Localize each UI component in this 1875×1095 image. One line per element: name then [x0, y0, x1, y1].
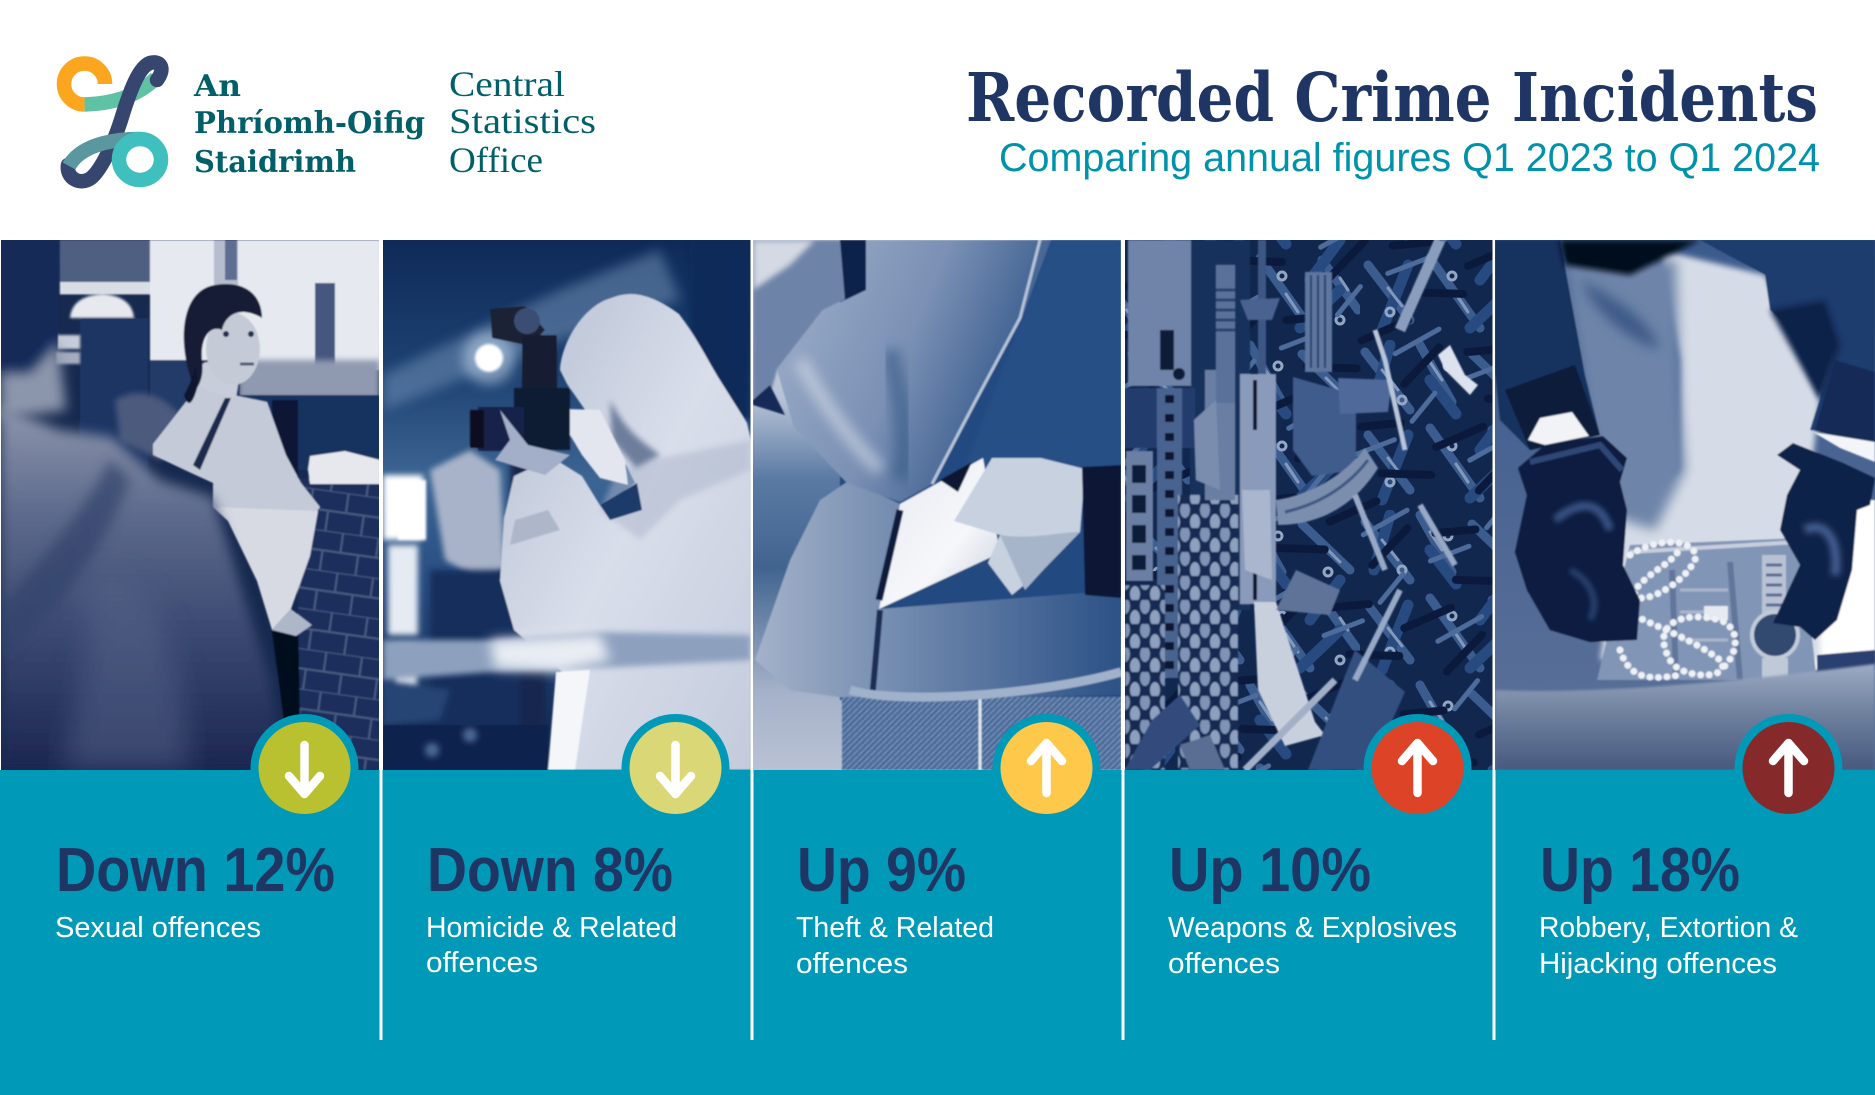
far arm [753, 240, 866, 400]
divider [380, 240, 382, 1040]
photo: pickpocket taking a phone [753, 240, 1121, 770]
logo text: English name: Statistics [449, 101, 596, 141]
logo text: Irish name: An [193, 69, 241, 104]
divider [1492, 240, 1496, 1040]
left glove [1515, 436, 1640, 642]
description: offences [426, 947, 538, 979]
suit [500, 294, 751, 770]
header logo: Central Statistics Office [64, 62, 596, 181]
police tape [383, 632, 751, 680]
photo: woman followed on a street [1, 240, 379, 770]
headline: Down 12% [56, 836, 335, 905]
badge: up arrow [992, 714, 1100, 822]
badge: up arrow [1364, 714, 1472, 822]
watch [1752, 555, 1798, 680]
description [1168, 912, 1457, 980]
bright metal [1438, 345, 1478, 395]
panel: robbery, extortion and hijacking offences [1495, 240, 1875, 980]
headline: Up 18% [1540, 836, 1740, 905]
divider [750, 240, 754, 1040]
shirt cuffs [1528, 412, 1589, 445]
woman [272, 616, 300, 722]
rifle [1240, 374, 1276, 604]
badge: up arrow [1734, 714, 1842, 822]
teal footer band [0, 770, 1875, 1095]
logo text: English name: Office [449, 140, 543, 180]
jewellery box [1597, 538, 1817, 680]
panel: theft and related offences [753, 240, 1121, 980]
description: Theft & Related [796, 912, 994, 944]
sweater [1495, 240, 1600, 450]
description [1539, 912, 1798, 980]
description: Homicide & Related [426, 912, 677, 944]
headline: Up 10% [1169, 836, 1371, 905]
magazine [1276, 448, 1378, 525]
logo text: English name [449, 64, 596, 180]
second gun [1293, 377, 1356, 476]
camera [470, 306, 570, 451]
pearls [1590, 542, 1735, 677]
brick pillar [298, 478, 380, 770]
person back [0, 405, 284, 770]
badge: down arrow [250, 714, 358, 822]
jeans [842, 697, 1121, 770]
panel: sexual offences [0, 240, 380, 944]
panel: weapons and explosives offences [1125, 240, 1493, 980]
person head [0, 240, 60, 372]
headline: Down 8% [427, 836, 673, 905]
description: Hijacking offences [1539, 948, 1777, 980]
cuff [1082, 465, 1121, 598]
description: Sexual offences [55, 912, 261, 944]
description: offences [796, 948, 908, 980]
foreground band [1817, 650, 1875, 672]
description [426, 912, 677, 979]
logo text: English name: Central [449, 64, 565, 104]
hand [954, 458, 1085, 595]
logo text: Irish name: Phríomh-Oifig [194, 106, 425, 141]
headline: Up 9% [797, 836, 966, 905]
photo: pile of firearms [1125, 240, 1492, 770]
description: Weapons & Explosives [1168, 912, 1457, 944]
panel: homicide and related offences [383, 240, 751, 979]
sleeve [777, 240, 1051, 502]
description: offences [1168, 948, 1280, 980]
phone [879, 458, 1000, 609]
description [796, 912, 994, 980]
light centre [1600, 250, 1820, 660]
divider [1122, 240, 1124, 1040]
photo: gloved hands taking jewellery [1495, 240, 1875, 770]
folds [1563, 260, 1685, 530]
description: Robbery, Extortion & [1539, 912, 1798, 944]
badge: down arrow [622, 714, 730, 822]
lower jacket [755, 480, 1121, 700]
logo text: Irish name [193, 69, 425, 180]
photo: forensic photographer [383, 240, 750, 770]
logo mark [64, 62, 161, 181]
logo text: Irish name: Staidrimh [194, 145, 356, 180]
subtitle: Comparing annual figures Q1 2023 to Q1 2024 [999, 136, 1820, 180]
right glove [1773, 443, 1875, 640]
